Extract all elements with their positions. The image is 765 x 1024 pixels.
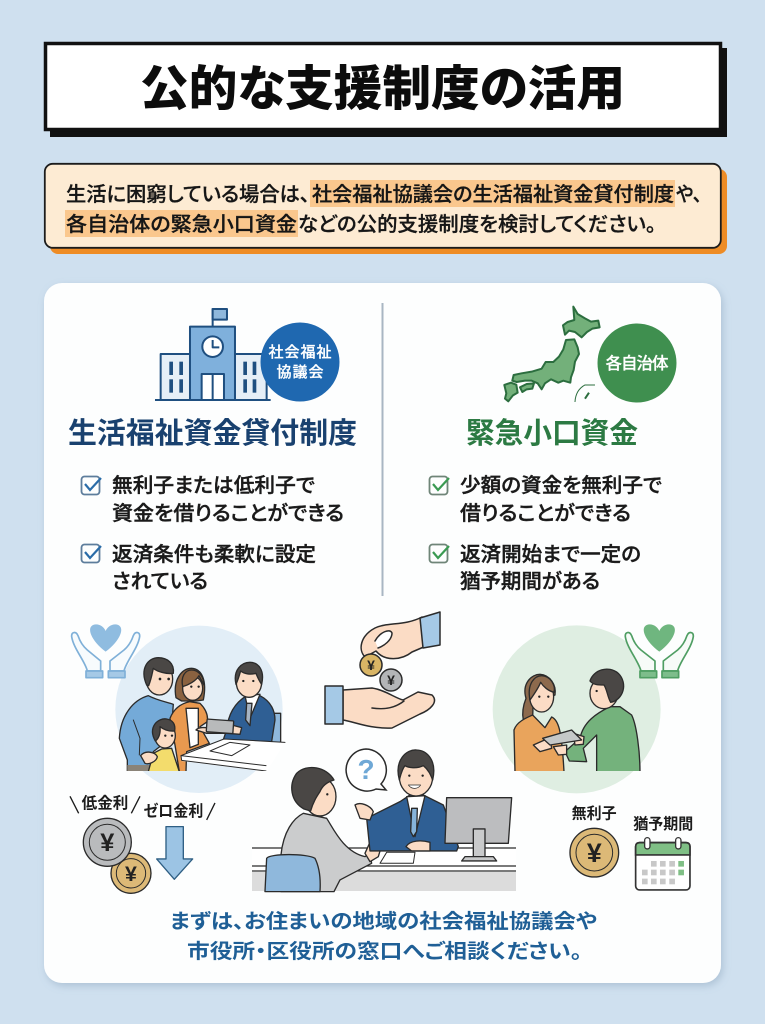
list: right: 少額の資金を無利子で <box>460 474 662 497</box>
closing message: 市役所・区役所の窓口へご相談ください。 <box>187 939 582 963</box>
callout: intro: などの公的支援制度を検討してください。 <box>298 213 656 236</box>
list: left: 無利子または低利子で <box>112 474 315 497</box>
heading: left: 生活福祉資金貸付制度 <box>68 417 357 450</box>
callout: intro: 社会福祉協議会の生活福祉資金貸付制度 <box>312 183 674 206</box>
panel: main card <box>44 283 721 983</box>
title: 公的な支援制度の活用 <box>140 63 625 116</box>
illustration: hands passing coins: ¥ <box>367 657 375 673</box>
heading: right: 緊急小口資金 <box>466 417 638 450</box>
icon: gold yen coin <box>570 828 619 877</box>
label: low interest: 低金利 <box>82 794 128 813</box>
figure: advisor <box>355 750 512 863</box>
badge: municipalities <box>598 324 676 402</box>
callout: intro: 生活に困窮している場合は、 <box>66 183 310 206</box>
label: no interest: 無利子 <box>572 805 617 822</box>
illustration: hands passing coins: ¥ <box>387 672 395 688</box>
callout: intro <box>45 164 727 254</box>
icon: welfare council building <box>155 308 271 400</box>
label: grace period: 猶予期間 <box>633 815 693 833</box>
icon: yen coins <box>83 818 151 893</box>
illustration: family consulting <box>70 624 285 893</box>
icon: yen coins: ¥ <box>100 829 114 857</box>
speech bubble <box>346 749 386 791</box>
list: left: 返済条件も柔軟に設定 <box>112 543 316 566</box>
label: low interest <box>70 794 215 820</box>
list: right <box>430 474 662 593</box>
faces: woman and man <box>538 690 598 698</box>
closing message <box>170 910 597 963</box>
label: low interest: ゼロ金利 <box>143 801 203 820</box>
title <box>46 44 727 137</box>
list: right: 猶予期間がある <box>460 570 600 593</box>
illustration: consultation at the counter <box>252 749 516 892</box>
icon: gold yen coin: ¥ <box>587 838 602 868</box>
closing message: まずは、お住まいの地域の社会福祉協議会や <box>170 910 597 933</box>
icon: yen coins: ¥ <box>125 862 137 886</box>
callout: intro: や、 <box>676 183 702 206</box>
list: left: 資金を借りることができる <box>112 502 344 525</box>
speech bubble: ? <box>357 754 375 785</box>
icon: calendar <box>636 838 690 890</box>
icon: green heart and hands <box>625 624 693 678</box>
badge: welfare council: 協議会 <box>276 364 324 381</box>
figure: client <box>265 768 383 892</box>
list: right: 返済開始まで一定の <box>460 543 641 566</box>
list: left: されている <box>112 571 208 593</box>
icon: blue heart and hands <box>72 624 140 678</box>
badge: welfare council <box>260 322 340 402</box>
arrow: rates down <box>157 827 193 879</box>
badge: welfare council: 社会福祉 <box>268 344 332 361</box>
icon: map of Japan <box>504 307 600 402</box>
callout: intro: 各自治体の緊急小口資金 <box>66 213 297 236</box>
faces: family <box>159 678 254 737</box>
illustration: hands passing coins <box>325 612 440 728</box>
list: left <box>82 474 344 593</box>
illustration: woman receiving funds <box>493 624 693 890</box>
badge: municipalities: 各自治体 <box>606 354 669 373</box>
list: right: 借りることができる <box>460 502 631 525</box>
